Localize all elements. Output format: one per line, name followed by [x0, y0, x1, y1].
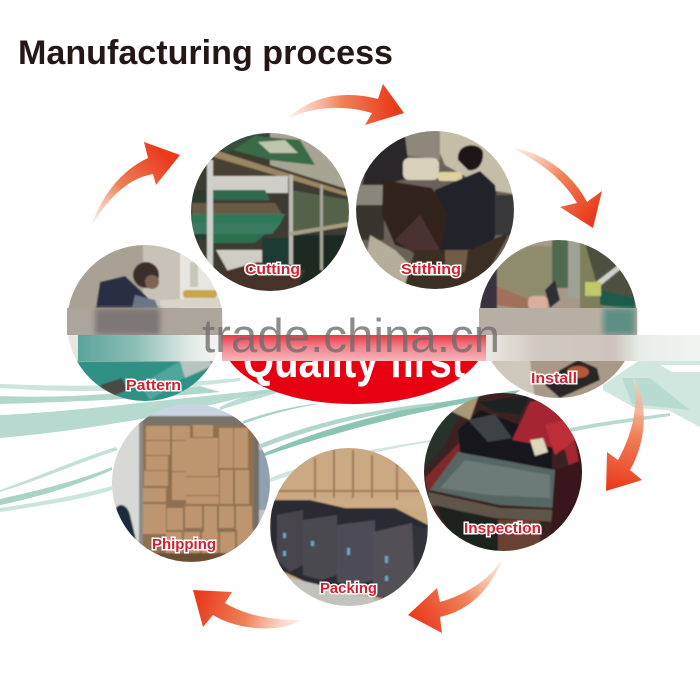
title: Manufacturing process — [18, 34, 393, 72]
label: pattern: Pattern — [126, 377, 181, 394]
arrow: cutting to stitching — [289, 84, 404, 125]
arrow: install to inspection — [606, 375, 644, 491]
panel: inspection — [420, 390, 586, 555]
banner: quality first — [221, 335, 487, 404]
panel: install — [478, 238, 640, 400]
watermark band over photos — [67, 308, 700, 361]
panel: packing — [268, 445, 430, 610]
label: stitching: Stithing — [401, 261, 461, 278]
panel: pattern — [65, 243, 225, 403]
photo: stacked boxes and luggage — [268, 445, 430, 610]
photo: shelves of green cases — [190, 130, 350, 295]
arrow: pattern to cutting — [92, 142, 180, 225]
photo: worker installing parts — [478, 238, 640, 400]
background teal ribbons — [0, 360, 700, 512]
label: inspection: Inspection — [464, 520, 541, 537]
red banner shape — [221, 335, 487, 404]
panel: phipping — [112, 404, 270, 562]
arrow: stitching to install — [513, 148, 602, 228]
label: install: Install — [531, 370, 577, 387]
label: packing: Packing — [320, 580, 377, 597]
watermark text: trade.china.cn — [202, 310, 500, 363]
label: cutting: Cutting — [245, 261, 300, 278]
panel: cutting — [190, 130, 350, 295]
photo: worker at sewing machine — [356, 131, 514, 289]
label: phipping: Phipping — [152, 536, 216, 553]
arrow: inspection to packing — [408, 558, 503, 633]
banner text: Quality first — [243, 335, 465, 387]
panel: stitching — [356, 131, 514, 289]
photo: container loaded with boxes — [112, 404, 270, 562]
photo: open suitcase with red coat — [420, 390, 586, 555]
arrow: packing to phipping — [193, 590, 300, 628]
photo: worker at pattern table — [65, 243, 225, 403]
